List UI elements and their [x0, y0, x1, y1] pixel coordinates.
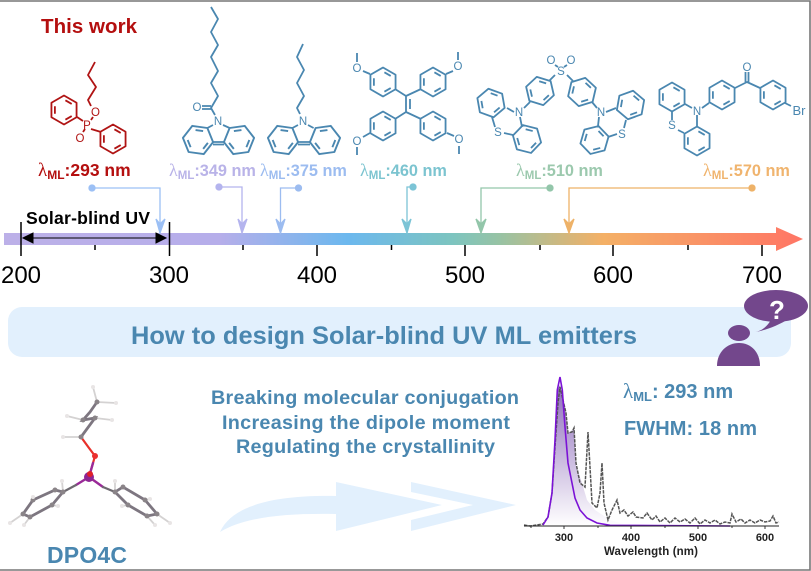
label: 293 nm: ML [47, 168, 65, 182]
spectrum chart: 500 [689, 532, 707, 544]
molecule: sulfone bis-phenothiazine: S [618, 129, 626, 141]
molecule: DPO4C structure: O [76, 133, 85, 145]
spectrum chart: Wavelength (nm) [604, 546, 698, 558]
result: peak wavelength: ML [633, 389, 652, 404]
label: 349 nm: :349 nm [194, 162, 256, 180]
molecule: N-acyl carbazole [180, 7, 257, 159]
spectrum chart: 400 [622, 532, 640, 544]
molecule: phenothiazine benzophenone: O [743, 62, 752, 74]
molecule: phenothiazine benzophenone [659, 62, 806, 156]
molecule: tetraphenylethylene [353, 52, 464, 155]
molecule: phenothiazine benzophenone: S [668, 120, 676, 132]
molecule: N-acyl carbazole: N [214, 116, 222, 128]
label: 293 nm: λ [38, 160, 48, 181]
design strategies: Increasing the dipole moment [222, 412, 510, 434]
banner title: How to design Solar-blind UV ML emitters [131, 322, 637, 350]
label: 460 nm: λ [360, 160, 369, 180]
axis labels: 200 [1, 262, 41, 289]
molecule: DPO4C structure: P [83, 120, 91, 132]
label: 510 nm: ML [525, 170, 541, 182]
axis labels: 300 [149, 262, 189, 289]
label: 510 nm: :510 nm [541, 162, 603, 180]
label: 570 nm: ML [712, 170, 728, 182]
label: 349 nm: ML [178, 170, 194, 182]
result: peak wavelength: : 293 nm [652, 381, 733, 403]
molecule: phenothiazine benzophenone: Br [792, 103, 806, 118]
arrow: pale curved arrow [220, 482, 516, 532]
molecule: N-hexyl carbazole: N [299, 116, 307, 128]
label: 375 nm: ML [269, 170, 285, 182]
connector: 293 nm [89, 185, 165, 233]
axis labels: 400 [297, 262, 337, 289]
label: 375 nm: λ [260, 160, 269, 180]
axis ticks [21, 222, 762, 256]
label: 349 nm: λ [169, 160, 178, 180]
molecule: sulfone bis-phenothiazine: O [547, 55, 556, 67]
connector: 460 nm [402, 184, 416, 233]
axis labels: 600 [593, 262, 633, 289]
connector: 510 nm [476, 185, 553, 233]
axis labels: 700 [742, 262, 782, 289]
3D molecular model: DPO4C [8, 385, 172, 527]
molecule: sulfone bis-phenothiazine: N [515, 107, 523, 119]
design strategies [211, 387, 519, 458]
label: 510 nm: λ [516, 160, 525, 180]
design strategies: Breaking molecular conjugation [211, 387, 519, 409]
label: 375 nm: :375 nm [285, 162, 347, 180]
label: 570 nm: λ [703, 160, 712, 180]
molecule: sulfone bis-phenothiazine: O [567, 55, 576, 67]
label: solar-blind UV: Solar-blind UV [26, 208, 150, 228]
molecule: tetraphenylethylene: O [353, 136, 362, 148]
connector: 375 nm [276, 185, 302, 233]
icon: person with question bubble: ? [769, 295, 785, 325]
spectrum chart [524, 377, 779, 558]
molecule: tetraphenylethylene: O [455, 134, 464, 146]
molecule: tetraphenylethylene: O [454, 61, 463, 73]
label: 460 nm: ML [369, 170, 385, 182]
molecule: DPO4C structure: O [91, 107, 100, 119]
spectrum chart: 600 [756, 532, 774, 544]
molecule: N-acyl carbazole: O [193, 102, 202, 114]
heading: this work: This work [41, 15, 138, 38]
molecule: DPO4C structure [51, 62, 126, 154]
banner [8, 307, 791, 357]
label: 293 nm: :293 nm [65, 160, 131, 180]
result: peak wavelength: λ [623, 379, 634, 403]
range arrow: solar-blind UV [23, 233, 166, 243]
icon: person with question bubble [717, 290, 808, 366]
molecule: phenothiazine benzophenone: N [693, 106, 701, 118]
wavelength axis arrow [4, 227, 803, 251]
molecule: sulfone bis-phenothiazine: S [494, 127, 502, 139]
molecule: tetraphenylethylene: O [353, 63, 362, 75]
molecule: sulfone bis-phenothiazine: N [597, 107, 605, 119]
axis labels: 500 [445, 262, 485, 289]
spectrum chart: 300 [555, 532, 573, 544]
molecule: sulfone bis-phenothiazine [476, 55, 645, 157]
molecule: sulfone bis-phenothiazine: S [557, 66, 565, 78]
molecule: N-hexyl carbazole [265, 44, 343, 159]
label: 460 nm: :460 nm [385, 162, 447, 180]
design strategies: Regulating the crystallinity [236, 436, 495, 458]
label: 570 nm: :570 nm [728, 162, 790, 180]
molecule name: DPO4C: DPO4C [47, 542, 127, 568]
connector: 349 nm [216, 184, 247, 233]
connector: 570 nm [564, 185, 755, 233]
result: FWHM: FWHM: 18 nm [624, 418, 757, 440]
axis labels [1, 262, 782, 289]
